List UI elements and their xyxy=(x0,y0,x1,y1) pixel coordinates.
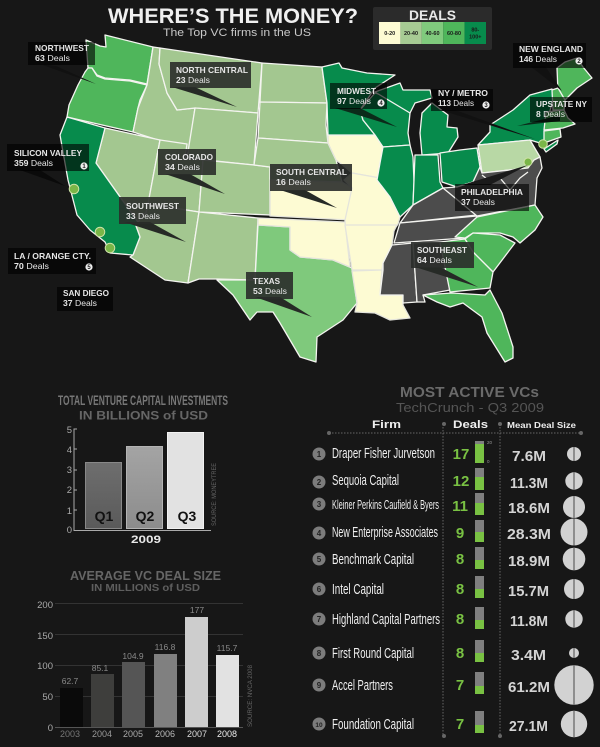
map label: texas: 53 Deals xyxy=(253,286,287,296)
map label: midwest: MIDWEST xyxy=(337,86,377,96)
map label: ny / metro: 113 Deals xyxy=(438,98,474,108)
row 4: new enterprise associates xyxy=(312,518,588,546)
legend: deals: 100+ xyxy=(469,34,481,40)
bar chart: total venture capital 2009: 5 xyxy=(67,425,72,436)
table header: Mean Deal Size xyxy=(507,421,577,430)
bar chart: average vc deal size: 62.7 xyxy=(62,676,79,686)
region: mountain and plains states xyxy=(96,47,342,283)
row 5: benchmark capital: Benchmark Capital xyxy=(332,552,414,568)
bar chart: total venture capital 2009 xyxy=(67,425,218,546)
US map xyxy=(60,35,592,362)
bar chart: average vc deal size: 115.7 xyxy=(217,643,238,653)
row 3: kleiner perkins caufield & byers: 18.6M xyxy=(508,501,550,517)
map label: philadelphia: PHILADELPHIA xyxy=(461,187,523,197)
row 1: draper fisher jurvetson: 0 xyxy=(487,459,490,464)
legend: deals: DEALS xyxy=(409,8,456,23)
bar chart: average vc deal size: 150 xyxy=(37,631,53,642)
map label: southeast xyxy=(411,242,478,287)
region: pennsylvania xyxy=(478,140,540,173)
map label: southwest: SOUTHWEST xyxy=(126,201,180,211)
row 4: new enterprise associates: 9 xyxy=(456,525,464,542)
row 10: foundation capital: Foundation Capital xyxy=(332,717,414,733)
map label: northwest: 63 Deals xyxy=(35,53,70,63)
title: WHERE’S THE MONEY? xyxy=(108,5,358,28)
map label: ny / metro xyxy=(431,88,535,139)
map label: colorado: 34 Deals xyxy=(165,162,200,172)
location markers xyxy=(69,140,547,253)
legend: deals: 80- xyxy=(471,28,479,34)
region: dark southern states xyxy=(380,157,542,303)
table heading: most active vcs xyxy=(396,385,544,415)
region: new england states xyxy=(544,58,592,143)
row 7: highland capital partners: 8 xyxy=(456,611,464,628)
map label: san diego: SAN DIEGO xyxy=(63,288,109,298)
row 6: intel capital: Intel Capital xyxy=(332,582,384,598)
row 10: foundation capital: 27.1M xyxy=(509,719,548,735)
chart heading: average vc deal size: AVERAGE VC DEAL SIZE xyxy=(70,569,221,583)
bar chart: average vc deal size: 100 xyxy=(37,661,53,672)
bar chart: average vc deal size: 2008 xyxy=(217,729,237,739)
row 9: accel partners: Accel Partners xyxy=(332,678,393,694)
map label: la / orange county: LA / ORANGE CTY. xyxy=(14,251,91,261)
map label: new england: 146 Deals xyxy=(519,54,557,64)
row 3: kleiner perkins caufield & byers: 11 xyxy=(452,498,468,515)
map label: midwest: 97 Deals xyxy=(337,96,371,106)
row 5: benchmark capital: 18.9M xyxy=(508,554,550,570)
row 5: benchmark capital: 5 xyxy=(317,555,322,564)
row 1: draper fisher jurvetson xyxy=(312,440,581,465)
map label: texas: TEXAS xyxy=(253,276,280,286)
map label: new england: 2 xyxy=(577,59,581,65)
row 2: sequoia capital: Sequoia Capital xyxy=(332,473,399,489)
row 6: intel capital: 8 xyxy=(456,581,464,598)
legend: deals: 0-20 xyxy=(384,31,395,37)
row 8: first round capital: 8 xyxy=(317,649,322,658)
row 7: highland capital partners xyxy=(312,607,583,630)
row 8: first round capital: 8 xyxy=(456,645,464,662)
map label: silicon valley xyxy=(7,144,89,186)
map label: philadelphia xyxy=(455,165,529,211)
table heading: most active vcs: MOST ACTIVE VCs xyxy=(400,385,539,401)
row 5: benchmark capital: 8 xyxy=(456,551,464,568)
map label: south central xyxy=(270,164,352,208)
subtitle: The Top VC firms in the US xyxy=(163,27,311,39)
region: midwest states xyxy=(322,63,558,217)
map label: ny / metro: NY / METRO xyxy=(438,88,488,98)
row 7: highland capital partners: 7 xyxy=(317,615,322,624)
map label: south central: 16 Deals xyxy=(276,177,311,187)
row 1: draper fisher jurvetson: Draper Fisher Jurvetson xyxy=(332,446,435,462)
map label: silicon valley: SILICON VALLEY xyxy=(14,148,82,158)
region: northwest states xyxy=(67,35,153,132)
region: california xyxy=(60,117,140,255)
map label: southeast: 64 Deals xyxy=(417,255,452,265)
region: south central states xyxy=(258,135,410,320)
map label: upstate ny xyxy=(517,97,592,126)
table header: Deals xyxy=(453,419,488,431)
map label: san diego: 37 Deals xyxy=(63,298,97,308)
row 9: accel partners: 9 xyxy=(317,681,322,690)
row 10: foundation capital: 10 xyxy=(315,722,323,729)
map label: northwest: NORTHWEST xyxy=(35,43,90,53)
bar chart: total venture capital 2009: 2 xyxy=(67,485,72,496)
bar chart: total venture capital 2009: 3 xyxy=(67,465,72,476)
map label: southwest xyxy=(119,197,186,242)
row 8: first round capital: First Round Capital xyxy=(332,646,414,662)
row 9: accel partners: 61.2M xyxy=(508,680,550,696)
bar chart: average vc deal size: 2006 xyxy=(155,729,175,739)
map label: southwest: 33 Deals xyxy=(126,211,160,221)
map label: upstate ny: 8 Deals xyxy=(536,109,565,119)
map label: ny / metro: 3 xyxy=(484,103,488,109)
map label: north central xyxy=(170,62,251,107)
row 7: highland capital partners: 11.8M xyxy=(510,614,548,630)
map label: new england xyxy=(513,43,586,91)
bar chart: average vc deal size: 0 xyxy=(48,723,53,734)
row 1: draper fisher jurvetson: 20 xyxy=(487,440,493,445)
row 7: highland capital partners: Highland Capital Partners xyxy=(332,612,440,628)
bar chart: average vc deal size: 2007 xyxy=(187,729,207,739)
map label: san diego xyxy=(57,287,113,311)
row 6: intel capital: 6 xyxy=(317,585,322,594)
row 10: foundation capital: 7 xyxy=(456,716,464,733)
row 6: intel capital: 15.7M xyxy=(508,584,549,600)
chart heading: average vc deal size: IN MILLIONS of USD xyxy=(91,583,200,594)
map label: philadelphia: 37 Deals xyxy=(461,197,495,207)
row 1: draper fisher jurvetson: 1 xyxy=(317,450,322,459)
bar chart: average vc deal size: SOURCE: NVCA 2008 xyxy=(247,665,254,727)
map label: northwest xyxy=(28,42,96,84)
table header xyxy=(372,419,577,431)
row 3: kleiner perkins caufield & byers: Kleiner Perkins Caufield & Byers xyxy=(332,498,439,512)
table grid lines xyxy=(327,422,583,738)
bar chart: average vc deal size: 2005 xyxy=(123,729,143,739)
map label: new england: NEW ENGLAND xyxy=(519,44,583,54)
bar chart: average vc deal size: 2003 xyxy=(60,729,80,739)
bar chart: total venture capital 2009: Q2 xyxy=(136,508,155,524)
map label: colorado: COLORADO xyxy=(165,152,213,162)
map label: la / orange county: 5 xyxy=(87,265,91,271)
row 4: new enterprise associates: New Enterprise Associates xyxy=(332,525,438,541)
row 9: accel partners xyxy=(312,665,594,705)
row 3: kleiner perkins caufield & byers xyxy=(312,493,585,518)
bar chart: total venture capital 2009: Q1 xyxy=(95,508,114,524)
chart heading: total venture capital xyxy=(58,392,228,422)
bar chart: average vc deal size: 200 xyxy=(37,600,53,611)
bar chart: total venture capital 2009: SOURCE: MONEYTREE xyxy=(211,462,218,526)
row 4: new enterprise associates: 4 xyxy=(317,529,322,538)
map label: silicon valley: 1 xyxy=(82,164,86,170)
row 2: sequoia capital xyxy=(312,468,583,492)
chart heading: total venture capital: TOTAL VENTURE CAPITAL INVESTMENTS xyxy=(58,392,228,408)
row 6: intel capital xyxy=(312,576,584,600)
row 4: new enterprise associates: 28.3M xyxy=(507,527,551,543)
map label: north central: NORTH CENTRAL xyxy=(176,65,248,75)
region: southeast states xyxy=(423,205,543,362)
row 5: benchmark capital xyxy=(312,547,585,570)
row 8: first round capital xyxy=(312,640,579,664)
region: texas xyxy=(217,225,357,362)
map label: colorado xyxy=(158,149,225,194)
map label: texas xyxy=(246,272,312,317)
bar chart: average vc deal size: 85.1 xyxy=(92,663,109,673)
bar chart: average vc deal size: 104.9 xyxy=(122,651,144,661)
bar chart: total venture capital 2009: 2009 xyxy=(131,534,161,546)
map label: south central: SOUTH CENTRAL xyxy=(276,167,347,177)
legend: deals: 60-80 xyxy=(447,31,461,37)
map label: north central: 23 Deals xyxy=(176,75,210,85)
chart heading: average vc deal size xyxy=(70,569,221,594)
map label: midwest: 4 xyxy=(379,101,383,107)
chart heading: total venture capital: IN BILLIONS of USD xyxy=(79,410,208,422)
map label: upstate ny: UPSTATE NY xyxy=(536,99,587,109)
bar chart: average vc deal size xyxy=(37,600,254,739)
legend: deals xyxy=(373,7,492,50)
row 2: sequoia capital: 2 xyxy=(317,478,322,487)
row 1: draper fisher jurvetson: 17 xyxy=(453,446,469,463)
row 9: accel partners: 7 xyxy=(456,677,464,694)
bar chart: total venture capital 2009: 0 xyxy=(67,525,72,536)
bar chart: total venture capital 2009: 4 xyxy=(67,445,72,456)
bar chart: average vc deal size: 2004 xyxy=(92,729,112,739)
bar chart: average vc deal size: 50 xyxy=(42,692,53,703)
map label: la / orange county xyxy=(8,248,96,274)
bar chart: average vc deal size: 116.8 xyxy=(155,642,176,652)
legend: deals: 40-60 xyxy=(425,31,440,37)
row 2: sequoia capital: 11.3M xyxy=(510,476,548,492)
bar chart: total venture capital 2009: 1 xyxy=(67,506,72,517)
map label: la / orange county: 70 Deals xyxy=(14,261,49,271)
row 8: first round capital: 3.4M xyxy=(511,648,546,664)
map label: midwest xyxy=(330,83,397,127)
row 1: draper fisher jurvetson: 7.6M xyxy=(512,449,546,465)
table heading: most active vcs: TechCrunch - Q3 2009 xyxy=(396,400,544,415)
bar chart: average vc deal size: 177 xyxy=(190,605,204,615)
map label: southeast: SOUTHEAST xyxy=(417,245,468,255)
map label: silicon valley: 359 Deals xyxy=(14,158,53,168)
bar chart: total venture capital 2009: Q3 xyxy=(178,508,197,524)
row 3: kleiner perkins caufield & byers: 3 xyxy=(317,500,322,509)
row 10: foundation capital xyxy=(312,711,587,737)
table header: Firm xyxy=(372,419,401,431)
row 2: sequoia capital: 12 xyxy=(453,473,469,490)
legend: deals: 20-40 xyxy=(404,31,418,37)
